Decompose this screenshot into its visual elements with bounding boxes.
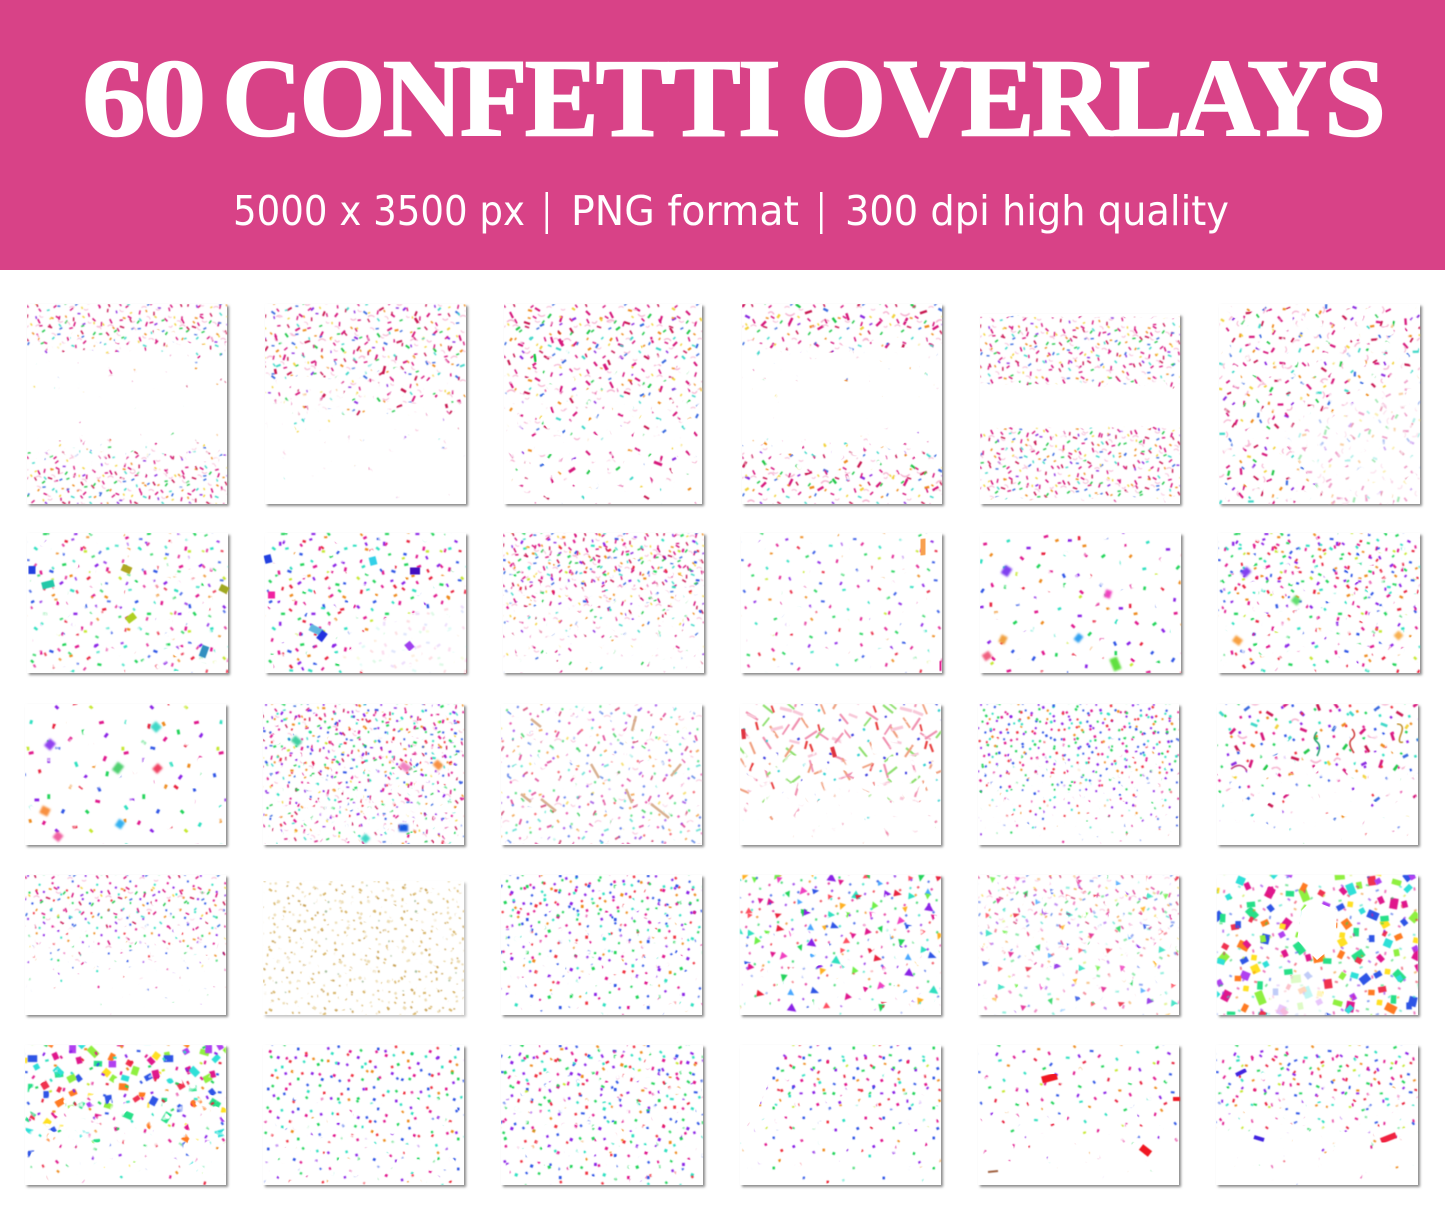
card 2: confetti falling from top <box>265 304 468 506</box>
card 9: confetti dense at top <box>503 533 706 675</box>
title: 60 <box>82 38 203 160</box>
card 26: small confetti <box>263 1045 466 1187</box>
subtitle: PNG format <box>571 187 799 235</box>
card 7: rectangular confetti <box>27 533 230 675</box>
card 6: confetti scattered <box>1219 304 1422 506</box>
card 16: dense stick confetti <box>740 704 943 847</box>
card 3: confetti dense at top <box>504 304 704 506</box>
card 22: triangle confetti <box>740 875 943 1017</box>
card 11: blurred confetti <box>980 533 1183 675</box>
card 4: confetti top and bottom bands <box>742 304 944 506</box>
card 30: confetti dense at top <box>1216 1045 1420 1187</box>
card 1: confetti top and bottom bands <box>27 304 229 506</box>
card 15: muted confetti <box>501 704 704 847</box>
card 25: heavy bright confetti at top <box>25 1045 228 1187</box>
card 5: two confetti stripes <box>980 314 1182 506</box>
card 21: dotted confetti <box>501 875 704 1017</box>
card 13: blurred large confetti <box>25 704 228 847</box>
card 24: large bright confetti <box>1217 875 1420 1017</box>
title <box>82 38 1383 160</box>
subtitle <box>233 187 1229 235</box>
subtitle: 300 dpi high quality <box>845 187 1229 235</box>
card 27: small confetti <box>501 1045 705 1187</box>
card 8: rectangular confetti left heavy <box>265 533 468 675</box>
card 19: small confetti at top <box>25 875 228 1017</box>
card 29: sparse confetti with large red pieces <box>978 1045 1181 1187</box>
subtitle: 5000 x 3500 px <box>233 187 525 235</box>
card 10: sparse confetti with large orange pieces <box>741 533 944 675</box>
card 20: gold confetti <box>263 881 466 1017</box>
title: OVERLAYS <box>800 38 1383 160</box>
title: CONFETTI <box>222 38 778 160</box>
card 18: ribbon confetti <box>1217 704 1420 847</box>
card 17: small dense confetti <box>978 704 1181 847</box>
card 14: dense colourful confetti <box>263 704 466 847</box>
pink header banner <box>0 0 1445 270</box>
card 12: dense blurred confetti <box>1218 533 1422 675</box>
card 28: small confetti on the right <box>740 1045 943 1187</box>
card 23: small triangle and streak confetti <box>978 875 1181 1017</box>
